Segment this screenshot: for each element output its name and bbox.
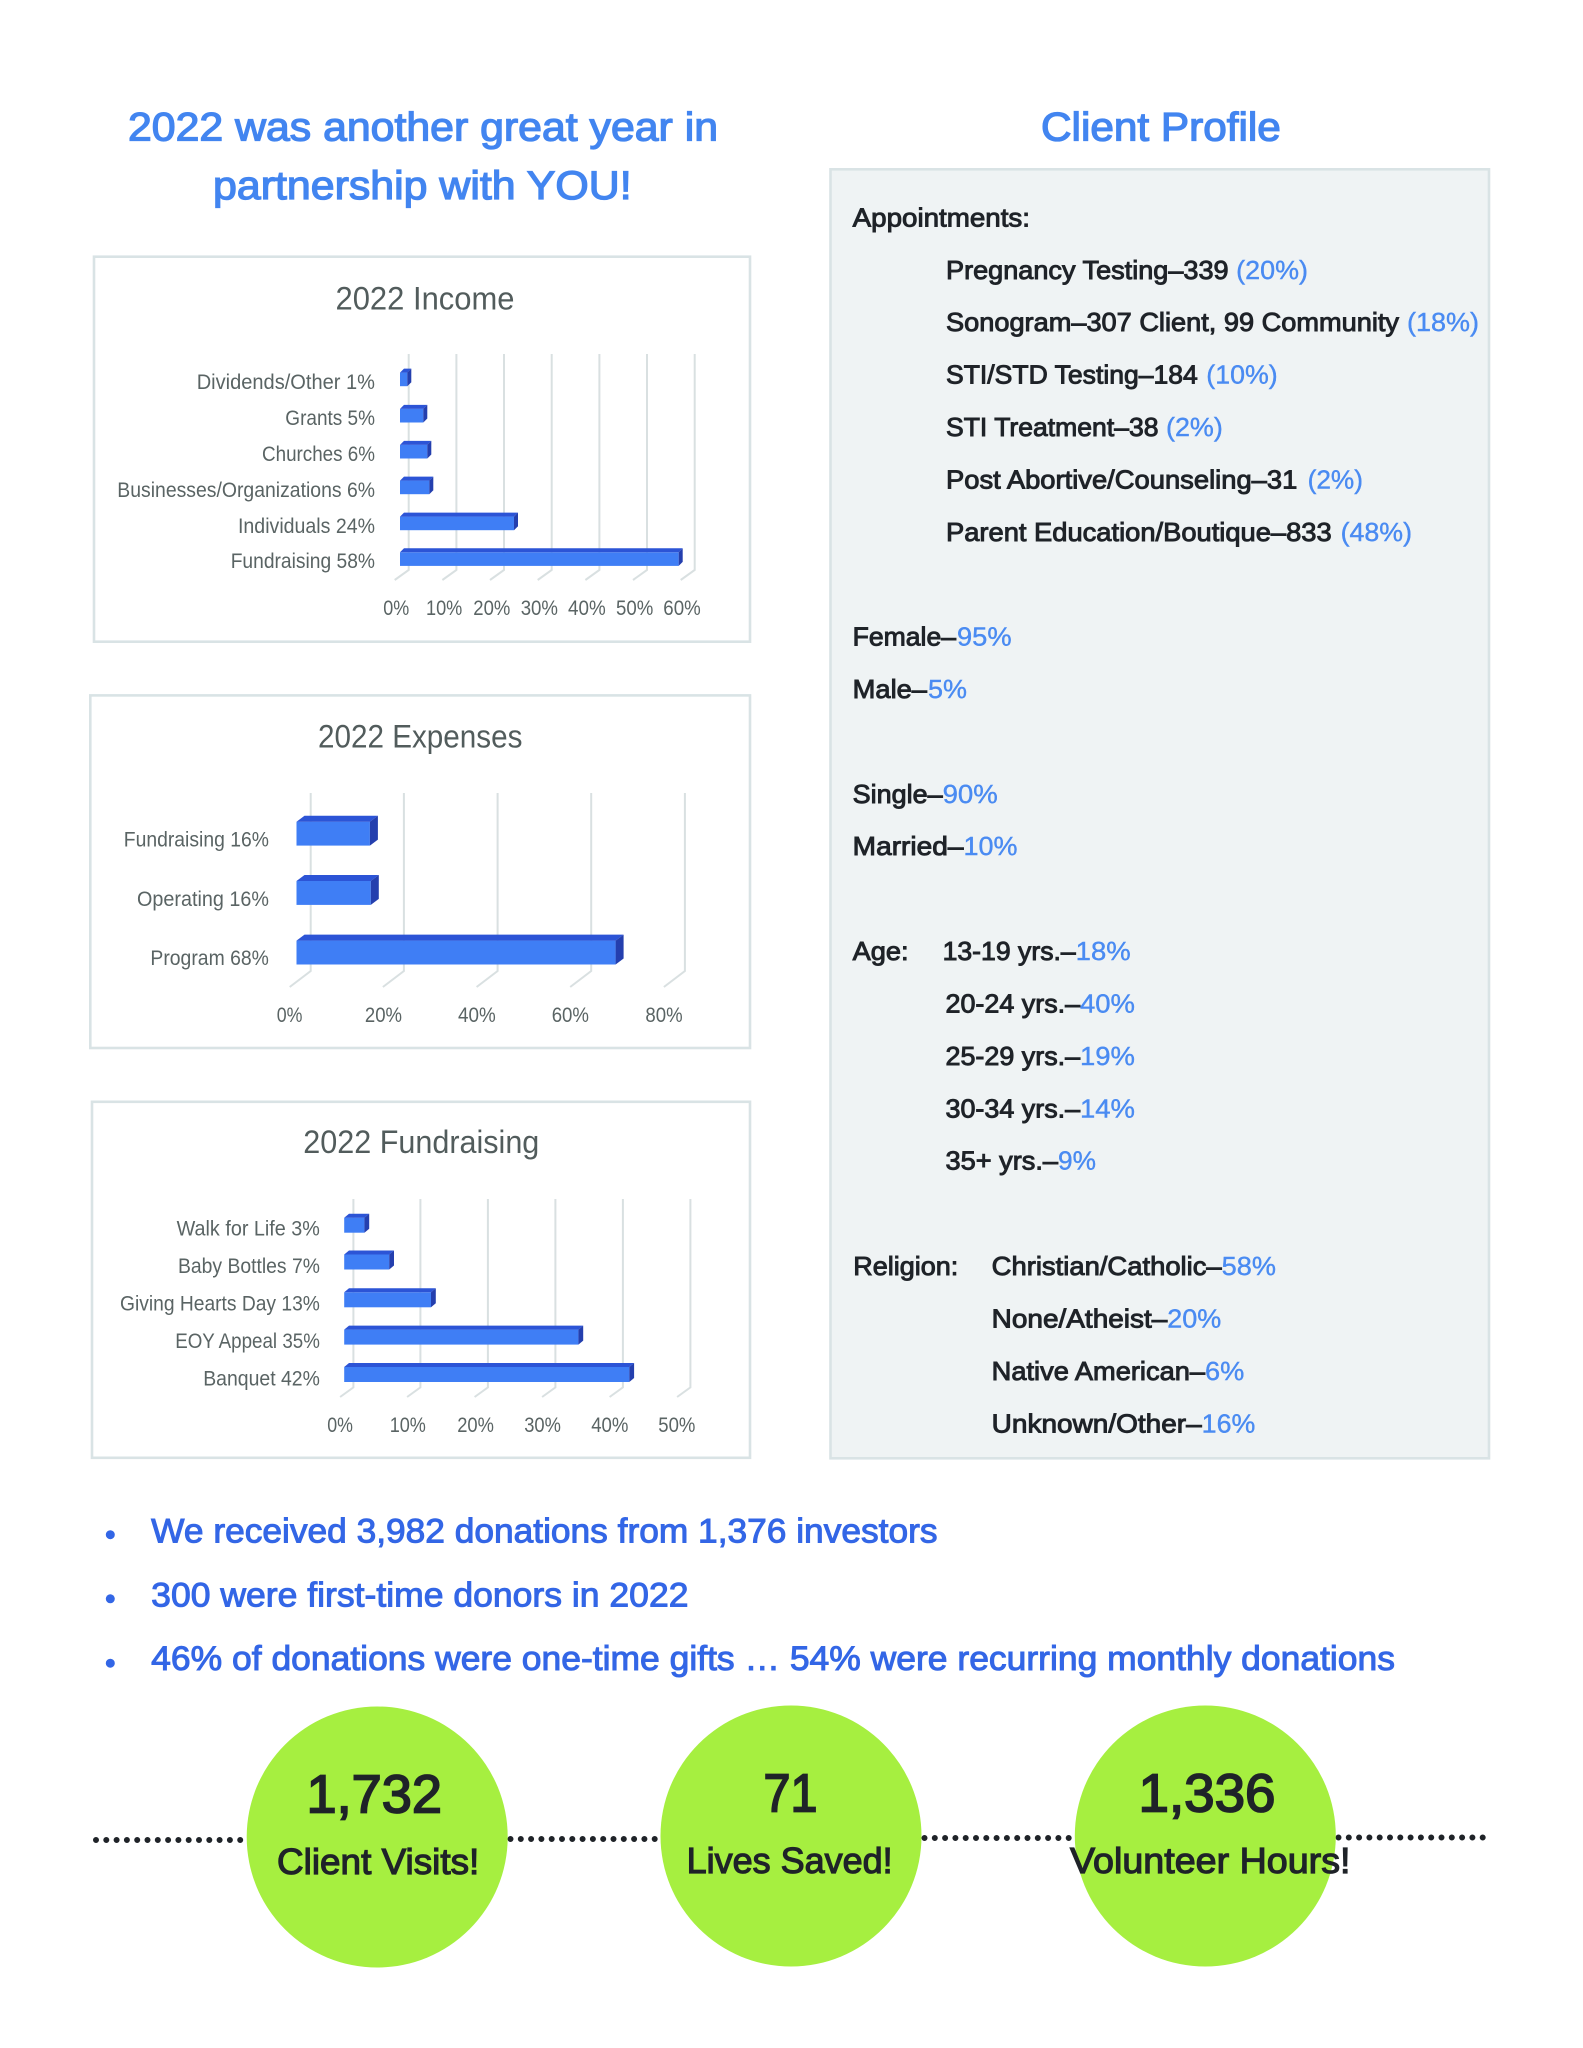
donation bullet list: 300 were first-time donors in 2022 [151,1576,688,1614]
age stats: 9% [1058,1146,1096,1176]
appointments list: Appointments: [853,202,1030,232]
appointments list: (18%) [1407,307,1479,337]
appointments list: (20%) [1236,255,1308,285]
stat circle: client visits: 1,732 [306,1765,442,1825]
category labels: expenses: Operating 16% [137,888,269,911]
bars: fundraising [344,1214,634,1382]
stat circle: volunteer hours: Volunteer Hours! [1070,1840,1350,1881]
axis labels: income [383,597,701,620]
marital status stats: 10% [964,831,1018,861]
age stats [853,936,1135,1176]
religion stats: Unknown/Other– [992,1408,1202,1438]
stat circle: lives saved: 71 [764,1764,818,1824]
appointments list: (10%) [1206,360,1278,390]
stat circle: lives saved [660,1706,922,1966]
appointments list: STI/STD Testing–184 [946,360,1198,390]
age stats: 40% [1080,988,1135,1018]
religion stats: 6% [1205,1356,1244,1386]
bars: income [400,369,683,566]
age stats: 18% [1076,936,1131,966]
gridlines: expenses [290,793,685,987]
appointments list: (48%) [1341,517,1412,547]
stat circle: lives saved: Lives Saved! [687,1840,893,1881]
category labels: fundraising: EOY Appeal 35% [175,1330,320,1353]
bars: expenses [296,816,624,964]
chart title: income: 2022 Income [336,280,514,316]
age stats: 30-34 yrs.– [946,1094,1081,1124]
religion stats [853,1251,1276,1438]
gender stats: Female– [853,622,957,652]
axis labels: fundraising: 10% [390,1414,426,1437]
category labels: fundraising: Walk for Life 3% [177,1218,320,1241]
axis labels: fundraising: 0% [327,1414,353,1437]
donation bullet list: 46% of donations were one-time gifts … 54% were recurring monthly donations [151,1640,1395,1678]
heading: great year: 2022 was another great year in [128,105,718,149]
axis labels: fundraising: 20% [457,1414,494,1437]
axis labels: expenses: 40% [458,1004,496,1027]
donation bullet list [106,1512,1395,1678]
axis labels: income: 20% [473,597,510,620]
axis labels: fundraising: 30% [524,1414,561,1437]
axis labels: income: 60% [663,597,701,620]
age stats: Age: [853,936,909,966]
donation bullet list: We received 3,982 donations from 1,376 investors [151,1512,937,1550]
category labels: income [117,371,375,573]
category labels: expenses [124,828,269,970]
appointments list: Pregnancy Testing–339 [946,255,1229,285]
gender stats [853,622,1012,704]
axis labels: fundraising: 40% [591,1414,628,1437]
age stats: 20-24 yrs.– [946,988,1081,1018]
appointments list: Sonogram–307 Client, 99 Community [946,307,1399,337]
category labels: fundraising [120,1218,320,1390]
gender stats: 5% [928,674,967,704]
axis labels: income: 10% [426,597,462,620]
marital status stats: Single– [853,779,943,809]
gridlines: fundraising [340,1199,690,1397]
appointments list [853,202,1479,547]
axis labels: expenses: 80% [645,1004,683,1027]
axis labels: expenses: 0% [277,1004,302,1027]
axis labels: income: 50% [616,597,653,620]
appointments list: (2%) [1308,464,1363,494]
age stats: 13-19 yrs.– [943,936,1076,966]
religion stats: 16% [1202,1408,1255,1438]
category labels: income: Fundraising 58% [231,550,375,573]
heading: great year: partnership with YOU! [213,164,632,208]
age stats: 14% [1080,1094,1135,1124]
heading: great year [128,105,718,208]
gender stats: Male– [853,674,928,704]
category labels: income: Businesses/Organizations 6% [117,479,375,502]
religion stats: 58% [1222,1251,1276,1281]
panel: 2022 expenses chart [90,695,750,1048]
axis labels: income: 30% [521,597,558,620]
axis labels: expenses: 20% [365,1004,402,1027]
dotted connector line [96,1838,1486,1840]
panel: client profile [830,169,1489,1458]
category labels: fundraising: Giving Hearts Day 13% [120,1292,320,1315]
category labels: expenses: Program 68% [150,947,269,970]
age stats: 25-29 yrs.– [946,1041,1081,1071]
age stats: 35+ yrs.– [946,1146,1059,1176]
appointments list: Post Abortive/Counseling–31 [946,464,1297,494]
marital status stats: 90% [943,779,998,809]
chart title: fundraising: 2022 Fundraising [303,1124,539,1160]
chart title: expenses: 2022 Expenses [318,718,522,754]
axis labels: expenses [277,1004,683,1027]
category labels: fundraising: Banquet 42% [203,1367,320,1390]
gridlines: income [395,354,695,580]
stat circle: client visits [247,1706,508,1968]
religion stats: Religion: [853,1251,958,1281]
category labels: income: Churches 6% [262,443,375,466]
axis labels: fundraising: 50% [658,1414,695,1437]
appointments list: STI Treatment–38 [946,412,1158,442]
panel: 2022 fundraising chart [92,1102,750,1458]
category labels: fundraising: Baby Bottles 7% [178,1255,320,1278]
category labels: expenses: Fundraising 16% [124,828,269,852]
heading: client profile: Client Profile [1041,105,1281,149]
stat circle: volunteer hours: 1,336 [1138,1764,1276,1824]
axis labels: expenses: 60% [552,1004,589,1027]
stat circle: volunteer hours [1070,1706,1350,1966]
marital status stats [853,779,1018,861]
religion stats: Native American– [992,1356,1206,1386]
appointments list: Parent Education/Boutique–833 [946,517,1332,547]
axis labels: fundraising [327,1414,695,1437]
religion stats: Christian/Catholic– [992,1251,1222,1281]
marital status stats: Married– [853,831,964,861]
religion stats: None/Atheist– [992,1304,1168,1334]
gender stats: 95% [957,622,1012,652]
stat circle: client visits: Client Visits! [277,1841,479,1882]
age stats: 19% [1080,1041,1135,1071]
axis labels: income: 0% [383,597,409,620]
appointments list: (2%) [1166,412,1223,442]
axis labels: income: 40% [568,597,606,620]
category labels: income: Dividends/Other 1% [197,371,375,394]
panel: 2022 income chart [94,257,750,642]
category labels: income: Individuals 24% [238,515,375,538]
category labels: income: Grants 5% [285,407,375,430]
religion stats: 20% [1167,1304,1221,1334]
